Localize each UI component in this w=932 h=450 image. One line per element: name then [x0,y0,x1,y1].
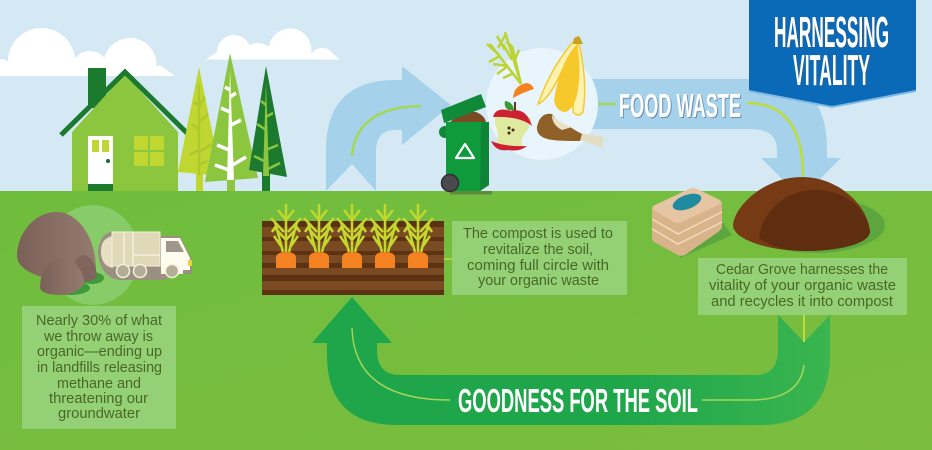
icon: chicken leg [537,114,603,147]
bin handle [439,126,451,138]
landfill caption: in landfills releasing [37,360,162,376]
title banner [749,0,916,108]
landfill caption: threatening our [49,391,148,407]
carrot 5 [403,204,433,268]
soil caption: coming full circle with [467,258,609,274]
house body [72,74,178,191]
carrots [271,204,433,268]
soil caption: your organic waste [478,273,599,289]
soil caption: The compost is used to [463,226,613,242]
landfill circle [47,205,139,305]
green soil arrow [312,297,830,425]
landfill caption: we throw away is [43,329,153,345]
landfill mounds [17,212,104,295]
icon: compost bin [439,94,492,194]
bin body [446,122,489,191]
chimney [88,68,106,108]
bag logo [671,190,703,214]
compost bags [652,188,732,258]
landfill caption: groundwater [58,406,140,422]
arrow line right [702,365,804,400]
carrot 3 [337,204,367,268]
light green tree [205,53,258,191]
landfill caption: Nearly 30% of what [36,313,162,329]
yellow tree [178,67,221,191]
icon: carrot top [487,32,534,98]
roof [61,72,189,135]
arrow line top [803,315,805,342]
connector line [444,258,452,260]
food waste arrow band [590,79,841,198]
compost mound [733,177,885,253]
carrot 1 [271,204,301,268]
landfill caption: methane and [57,376,141,392]
bin lid [441,94,486,123]
soil caption: revitalize the soil, [483,242,593,258]
arrow line [352,106,421,156]
bin shadow [450,191,492,194]
carrot 4 [370,204,400,268]
left cloud [0,28,175,76]
house [61,68,189,191]
compost caption: and recycles it into compost [711,294,893,310]
door [88,136,113,191]
arrow line left [352,328,450,400]
trees [178,53,287,191]
title text [774,8,889,95]
right cloud [206,28,340,60]
icon: apple core [491,101,532,150]
landfill caption [22,306,176,429]
sky [0,0,932,192]
soil caption [452,221,627,295]
window [134,136,164,166]
grass field [0,191,932,450]
compost caption: vitality of your organic waste [709,278,896,294]
garbage truck [98,232,192,280]
bin wheel [442,174,458,192]
dark tree [249,66,287,191]
blue arrow to bin [326,66,451,191]
carrot 2 [304,204,334,268]
icon: banana peel [538,36,585,115]
soil label: GOODNESS FOR THE SOIL [458,382,698,419]
compost caption: Cedar Grove harnesses the [716,262,888,278]
compost caption [698,258,907,315]
soil bed [262,221,444,295]
landfill caption: organic—ending up [37,344,162,360]
food scraps circle [486,48,598,160]
arrow line [747,103,803,176]
recycle symbol [456,144,474,158]
line from circle to label [598,103,616,105]
compost [448,112,486,124]
food waste label: FOOD WASTE [619,87,741,124]
